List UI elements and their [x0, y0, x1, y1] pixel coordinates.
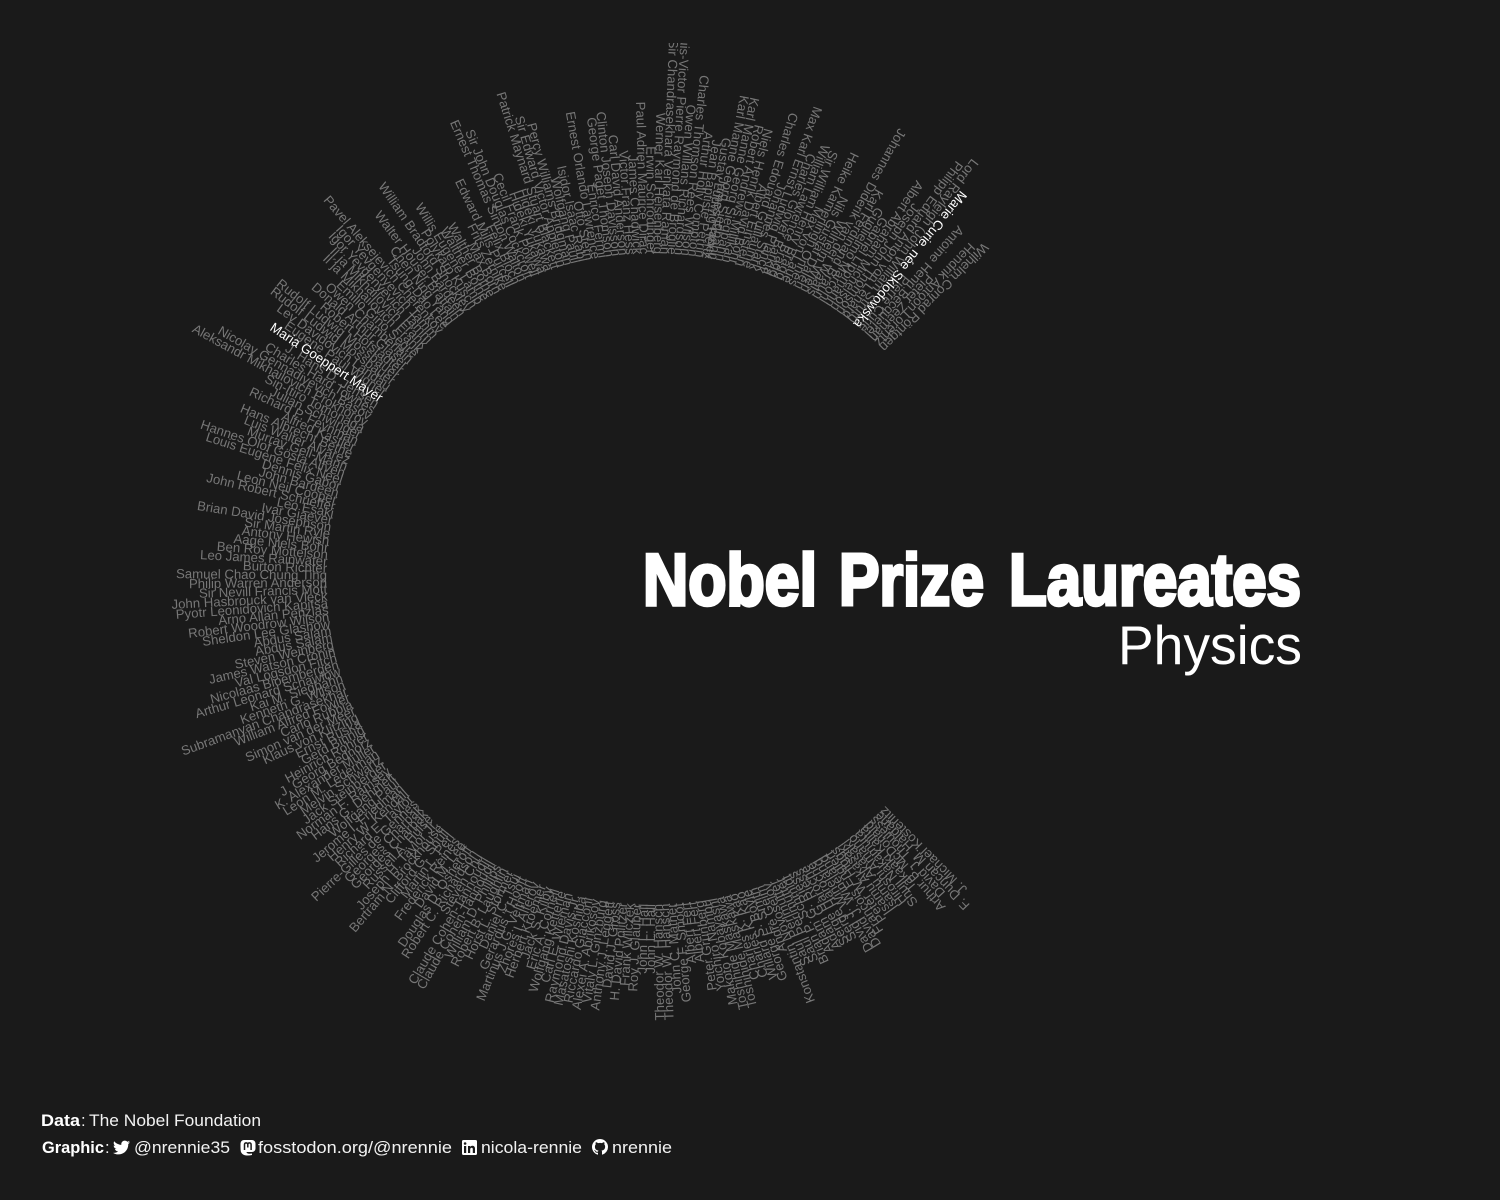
radial ring of laureate names: David J. Wineland	[810, 856, 876, 955]
radial ring of laureate names: Johannes Diderik van der Waals	[804, 126, 909, 299]
radial ring of laureate names: Victor Franz Hess	[616, 150, 638, 256]
radial ring of laureate names: Pyotr Leonidovich Kapitsa	[175, 595, 329, 622]
radial ring of laureate names: Adam G. Riess	[791, 866, 844, 952]
radial ring of laureate names: Robert B. Laughlin	[447, 865, 511, 969]
radial ring of laureate names: Albert Abraham Michelson	[828, 178, 926, 314]
radial ring of laureate names: Serge Haroche	[803, 859, 860, 944]
radial ring of laureate names: Albert Fert	[678, 901, 699, 964]
radial ring of laureate names: Jean Baptiste Perrin	[692, 139, 724, 259]
radial ring of laureate names: Charles Glover Barkla	[759, 151, 819, 278]
radial ring of laureate names: David J. Wineland	[816, 852, 884, 950]
radial ring of laureate names: James Chadwick	[625, 154, 645, 255]
radial ring of laureate names: Murray Gell-Mann	[245, 423, 350, 474]
radial ring of laureate names: Max von Laue	[779, 204, 827, 286]
title	[643, 540, 1301, 621]
radial ring of laureate names: Robert Hofstadter	[317, 299, 407, 377]
title: Prize	[839, 540, 984, 621]
radial ring of laureate names: William Lawrence Bragg	[766, 143, 833, 280]
radial ring of laureate names: Andre Geim	[752, 883, 790, 955]
radial ring of laureate names: Shuji Nakamura	[850, 827, 921, 910]
radial ring of laureate names: Antony Hewish	[241, 523, 330, 548]
radial ring of laureate names: William Bradford Shockley	[375, 179, 475, 315]
radial ring of laureate names: Konstantin Novoselov	[759, 880, 818, 1005]
radial ring of laureate names: Luis Walter Alvarez	[242, 412, 352, 467]
radial ring of laureate names: Felix Bloch	[483, 222, 524, 287]
radial ring of laureate names: Polykarp Kusch	[418, 226, 481, 311]
radial ring of laureate names: Norman F. Ramsey	[293, 764, 394, 843]
radial ring of laureate names: Ernest Thomas Sinton Walton	[447, 118, 530, 284]
radial ring of laureate names: Henry W. Kendall	[324, 786, 411, 864]
radial ring of laureate names: Il´ja Mikhailovich Frank	[320, 251, 426, 356]
radial ring of laureate names: Jack S. Kilby	[517, 884, 556, 961]
radial ring of laureate names: Owen Chamberlain	[323, 279, 416, 366]
radial ring of laureate names: Richard E. Taylor	[332, 791, 416, 870]
radial ring of laureate names: Wolfgang Paul	[326, 775, 402, 840]
radial ring of laureate names: J. Georg Bednorz	[277, 734, 374, 799]
radial ring of laureate names: Eric A. Cornell	[523, 887, 562, 971]
radial ring of laureate names: Werner Karl Heisenberg	[651, 113, 668, 254]
radial ring of laureate names: Hideki Yukawa	[506, 189, 550, 276]
radial ring of laureate names: Arthur B. McDonald	[861, 818, 948, 914]
radial ring of laureate names: Anthony J. Leggett	[587, 900, 617, 1011]
radial ring of laureate names: Frits Zernike	[464, 221, 511, 293]
radial ring of laureate names: Rudolf Ludwig Mössbauer	[268, 284, 399, 388]
radial ring of laureate names: Alexei A. Abrikosov	[569, 897, 603, 1011]
radial ring of laureate names: Isamu Akasaki	[833, 840, 895, 918]
radial ring of laureate names: Zhores I. Alferov	[494, 879, 543, 975]
radial ring of laureate names: James Franck	[702, 176, 731, 261]
footer: graphic credits: nrennie	[612, 1139, 672, 1157]
radial ring of laureate names: Heinrich Rohrer	[282, 728, 371, 786]
radial ring of laureate names: Georges Charpak	[347, 806, 431, 892]
radial ring of laureate names: Joseph H. Taylor Jr.	[353, 816, 441, 913]
radial ring of laureate names: Herbert Kroemer	[502, 882, 549, 980]
footer: graphic credits: :	[105, 1139, 110, 1157]
radial ring of laureate names: Robert Woodrow Wilson	[187, 609, 330, 641]
icon: linkedin	[462, 1140, 477, 1155]
radial ring of laureate names: Pierre Curie	[856, 272, 913, 336]
radial ring of laureate names: Sir Chandrasekhara Venkata Raman	[658, 39, 681, 255]
title: Laureates	[1009, 540, 1301, 621]
footer: data source: Data	[41, 1112, 81, 1130]
radial ring of laureate names: F. Duncan M. Haldane	[871, 809, 973, 913]
radial ring of laureate names: Sir Martin Ryle	[243, 514, 331, 541]
radial ring of laureate names: Theodor W. Hänsch	[650, 904, 667, 1021]
radial ring of laureate names: Sir William Henry Bragg	[773, 148, 841, 283]
radial ring of laureate names: Hannes Olof Gösta Alfvén	[199, 417, 347, 480]
radial ring of laureate names: John C. Mather	[664, 902, 684, 994]
radial ring of laureate names: Gerardus 't Hooft	[476, 874, 530, 972]
radial ring of laureate names: Chen Ning Yang	[387, 243, 458, 328]
radial ring of laureate names: Martin L. Perl	[397, 830, 457, 901]
radial ring of laureate names: Guglielmo Marconi	[816, 205, 886, 306]
highlighted name: Maria Goeppert Mayer: Maria Goeppert Mayer	[267, 320, 386, 405]
radial ring of laureate names: Toshihide Maskawa	[719, 893, 760, 1009]
radial ring of laureate names: William D. Phillips	[441, 861, 504, 961]
radial ring of laureate names: Bertram N. Brockhouse	[346, 821, 446, 935]
radial ring of laureate names: Hideki Yukawa	[515, 187, 556, 274]
radial ring of laureate names: Paul Adrien Maurice Dirac	[633, 101, 652, 255]
radial ring of laureate names: Igor Yevgenyevich Tamm	[333, 222, 442, 341]
radial ring of laureate names	[171, 0, 992, 1021]
radial ring of laureate names: Robert C. Richardson	[398, 847, 480, 961]
radial ring of laureate names: Sheldon Lee Glashow	[201, 616, 332, 649]
radial ring of laureate names: Serge Haroche	[797, 863, 852, 948]
footer: graphic credits: @nrennie35	[134, 1139, 230, 1157]
radial ring of laureate names: Eugene Paul Wigner	[282, 318, 390, 400]
footer: graphic credits: Graphic	[42, 1139, 104, 1157]
radial ring of laureate names: Arthur Leonard Schawlow	[193, 664, 343, 721]
radial ring of laureate names: Wilhelm Wien	[798, 217, 849, 295]
radial ring of laureate names: Pieter Zeeman	[867, 271, 936, 345]
radial ring of laureate names: George E. Smith	[746, 886, 790, 983]
radial ring of laureate names: Jack Steinberger	[300, 758, 390, 827]
radial ring of laureate names: James Watson Cronin	[207, 644, 337, 687]
radial ring of laureate names: Frank Wilczek	[617, 902, 637, 986]
radial ring of laureate names: John Bardeen	[409, 244, 469, 319]
radial ring of laureate names: Karl Manne Georg Siegbahn	[713, 96, 762, 263]
radial ring of laureate names: Erwin Schrödinger	[643, 146, 659, 255]
radial ring of laureate names: Sir John Douglas Cockcroft	[462, 127, 537, 281]
radial ring of laureate names: Lev Davidovich Landau	[274, 301, 394, 394]
radial ring of laureate names: Toshihide Maskawa	[712, 895, 751, 1011]
radial ring of laureate names: Samuel Chao Chung Ting	[176, 566, 327, 583]
radial ring of laureate names: Carl David Anderson	[605, 134, 631, 256]
radial ring of laureate names: Charles K. Kao	[726, 892, 762, 982]
radial ring of laureate names: Charles K. Kao	[732, 890, 771, 979]
radial ring of laureate names: Nicolay Gennadiyevich Basov	[216, 323, 375, 423]
radial ring of laureate names: Claude Cohen-Tannoudji	[414, 858, 498, 992]
radial ring of laureate names: Brian David Josephson	[196, 498, 332, 534]
radial ring of laureate names: Klaus von Klitzing	[260, 710, 361, 767]
radial ring of laureate names: Horst L. Störmer	[461, 868, 517, 962]
radial ring of laureate names: George Paget Thomson	[584, 116, 617, 258]
radial ring of laureate names: Sir Edward Victor Appleton	[512, 114, 570, 269]
radial ring of laureate names: Ernst Ruska	[293, 716, 364, 761]
radial ring of laureate names: Charles Thomson Rees Wilson	[678, 74, 712, 257]
radial ring of laureate names: Louis Eugène Félix Néel	[204, 429, 345, 487]
radial ring of laureate names: John L. Hall	[635, 904, 651, 974]
radial ring of laureate names: Otto Stern	[570, 200, 597, 262]
radial ring of laureate names: Philipp Eduard Anton von Lenard	[839, 158, 966, 322]
radial ring of laureate names: Gerd Binnig	[298, 722, 367, 768]
radial ring of laureate names: Pavel Aleksejevich Cherenkov	[321, 193, 447, 337]
radial ring of laureate names: Saul Perlmutter	[772, 875, 821, 965]
radial ring of laureate names: Steven Chu	[437, 851, 486, 917]
radial ring of laureate names: Ernest Orlando Lawrence	[563, 110, 603, 260]
radial ring of laureate names: Niels Henrik David Bohr	[726, 127, 776, 267]
radial ring of laureate names: Donald Arthur Glaser	[309, 279, 412, 372]
radial ring of laureate names: Edward Mills Purcell	[452, 176, 517, 290]
radial ring of laureate names: George F. Smoot	[671, 902, 694, 1003]
radial ring of laureate names: Brian P. Schmidt	[778, 872, 832, 966]
icon: github	[592, 1139, 608, 1155]
radial ring of laureate names: K. Alexander Müller	[272, 740, 378, 813]
radial ring of laureate names: Russell A. Hulse	[359, 812, 436, 892]
radial ring of laureate names: Enrico Fermi	[584, 183, 610, 259]
radial ring of laureate names: Antoine Henri Becquerel	[861, 223, 967, 340]
radial ring of laureate names: Peter W. Higgs	[827, 844, 889, 926]
radial ring of laureate names: Abdus Salam	[254, 630, 334, 659]
radial ring of laureate names: Willard S. Boyle	[739, 888, 781, 981]
radial ring of laureate names: Peter Grünberg	[692, 899, 720, 992]
radial ring of laureate names: Wolfgang Pauli	[548, 175, 583, 265]
radial ring of laureate names: Leo James Rainwater	[200, 547, 328, 569]
title: Nobel	[643, 540, 817, 621]
icon: twitter	[113, 1140, 130, 1154]
radial ring of laureate names: Hans G. Dehmelt	[308, 769, 398, 843]
radial ring of laureate names: Leon Neil Cooper	[235, 468, 339, 507]
radial ring of laureate names: H. David Politzer	[607, 901, 630, 1001]
radial ring of laureate names: William Alfred Fowler	[232, 690, 353, 749]
radial ring of laureate names: Owen Willans Richardson	[672, 104, 699, 256]
radial ring of laureate names: Martinus J.G. Veltman	[473, 877, 536, 1003]
radial ring of laureate names: Joseph John Thomson	[834, 201, 923, 318]
radial ring of laureate names: Max Born	[465, 239, 505, 296]
radial ring of laureate names: Daniel C. Tsui	[476, 871, 523, 951]
subtitle: Physics	[1118, 614, 1302, 676]
radial ring of laureate names: Pierre-Gilles de Gennes	[308, 796, 421, 904]
radial ring of laureate names: Makoto Kobayashi	[705, 897, 740, 1006]
radial ring of laureate names: Saul Perlmutter	[765, 878, 813, 968]
footer: data source: The Nobel Foundation	[89, 1112, 261, 1130]
radial ring of laureate names: Philip Warren Anderson	[189, 575, 327, 591]
radial ring of laureate names: Douglas D. Osheroff	[395, 842, 474, 950]
radial ring of laureate names: Jerome I. Friedman	[309, 781, 407, 865]
radial ring of laureate names: Carl E. Wieman	[538, 891, 576, 984]
radial ring of laureate names: Aleksandr Mikhailovich Prokhorov	[190, 321, 371, 429]
highlighted name: Marie Curie: Marie Curie, née Sklodowska	[850, 188, 970, 332]
radial ring of laureate names: Charles Hard Townes	[262, 339, 378, 417]
radial ring of laureate names: John Robert Schrieffer	[205, 470, 337, 514]
radial ring of laureate names: Il´ja Mikhailovich Frank	[327, 244, 431, 351]
radial ring of laureate names: Hiroshi Amano	[845, 832, 909, 909]
radial ring of laureate names: Adam G. Riess	[785, 869, 836, 956]
radial ring of laureate names: Willis Eugene Lamb	[412, 200, 487, 307]
footer: graphic credits	[42, 1139, 672, 1157]
radial ring of laureate names: J. Hans D. Jensen	[283, 341, 382, 411]
radial ring of laureate names: Subramanyan Chandrasekhar	[179, 683, 350, 758]
radial ring of laureate names: Steven Weinberg	[233, 637, 335, 672]
radial ring of laureate names: David J. Thouless	[866, 813, 948, 901]
radial ring of laureate names: François Englert	[821, 848, 886, 937]
radial ring of laureate names: Wolfgang Ketterle	[526, 889, 569, 994]
radial ring of laureate names: John Hasbrouck van Vleck	[171, 588, 328, 612]
footer: data source: :	[81, 1112, 86, 1130]
radial ring of laureate names: Rudolf Ludwig Mössbauer	[274, 276, 403, 383]
radial ring of laureate names: Vitaly L. Ginzburg	[579, 899, 610, 1004]
radial ring of laureate names: John Bardeen	[257, 464, 341, 500]
radial ring of laureate names: Nils Gustaf Dalén	[792, 194, 851, 292]
radial ring of laureate names: Karl Manne Georg Siegbahn	[706, 94, 752, 261]
radial ring of laureate names: Burton Richter	[243, 558, 328, 576]
radial ring of laureate names: Hendrik Antoon Lorentz	[872, 240, 978, 350]
radial ring of laureate names: Gustav Ludwig Hertz	[699, 137, 734, 260]
radial ring of laureate names: Aage Niels Bohr	[233, 531, 330, 555]
radial ring of laureate names: Val Logsdon Fitch	[233, 650, 338, 690]
radial ring of laureate names: Gabriel Lippmann	[822, 214, 891, 310]
radial ring of laureate names: Karl Ferdinand Braun	[810, 187, 886, 303]
radial ring of laureate names: Roy J. Glauber	[625, 903, 644, 992]
radial ring of laureate names: John L. Hall	[643, 904, 658, 974]
radial ring of laureate names: Emilio Gino Segrè	[334, 277, 421, 361]
radial ring of laureate names: Kai M. Siegbahn	[248, 670, 345, 714]
radial ring of laureate names: Takaaki Kajita	[855, 822, 920, 895]
icon: mastodon	[240, 1140, 256, 1156]
radial ring of laureate names: Percy Williams Bridgman	[524, 121, 576, 267]
radial ring of laureate names: Alfred Kastler	[279, 409, 358, 455]
radial ring of laureate names: Isamu Akasaki	[839, 836, 902, 913]
radial ring of laureate names: Sin-Itiro Tomonaga	[262, 371, 368, 436]
radial ring of laureate names: Albert Fert	[685, 900, 707, 964]
radial ring of laureate names: Sir Nevill Francis Mott	[199, 582, 328, 601]
radial ring of laureate names: Lord Rayleigh (John William Strutt)	[845, 156, 981, 327]
radial ring of laureate names: Charles Edouard Guillaume	[740, 111, 801, 270]
radial ring of laureate names: Georges Charpak	[341, 801, 426, 885]
radial ring of laureate names: Leo Esaki	[275, 494, 335, 521]
radial ring of laureate names: Abdus Salam	[252, 623, 332, 650]
radial ring of laureate names: J. Michael Kosterlitz	[876, 804, 970, 897]
radial ring of laureate names: Ivar Giaever	[260, 500, 334, 528]
radial ring of laureate names: Walter Houser Brattain	[372, 208, 463, 323]
radial ring of laureate names: Dennis Gabor	[260, 456, 343, 494]
radial ring of laureate names: Clifford G. Shull	[382, 826, 452, 906]
radial ring of laureate names: Arthur Holly Compton	[685, 131, 716, 257]
radial ring of laureate names: Isidor Isaac Rabi	[554, 164, 590, 263]
radial ring of laureate names: David M. Lee	[411, 839, 469, 911]
radial ring of laureate names: Simon van der Meer	[243, 703, 358, 765]
radial ring of laureate names: Richard P. Feynman	[247, 384, 361, 448]
radial ring of laureate names: Walther Bothe	[437, 224, 493, 303]
radial ring of laureate names: Wilhelm Conrad Röntgen	[877, 240, 992, 355]
radial ring of laureate names: Kenneth G. Wilson	[238, 677, 347, 727]
radial ring of laureate names: Albert Einstein	[733, 182, 770, 268]
radial ring of laureate names: Julian Schwinger	[268, 384, 365, 442]
radial ring of laureate names: Masatoshi Koshiba	[551, 894, 589, 1007]
radial ring of laureate names: Johannes Stark	[746, 181, 789, 273]
radial ring of laureate names: Nicolaas Bloembergen	[208, 657, 340, 707]
radial ring of laureate names: Tsung-Dao Lee	[384, 253, 452, 332]
radial ring of laureate names: Theodor W. Hänsch	[657, 903, 677, 1021]
radial ring of laureate names: Claude Cohen-Tannoudji	[405, 854, 492, 987]
radial ring of laureate names: Hans Albrecht Bethe	[238, 401, 355, 461]
radial ring of laureate names: David J. Gross	[599, 901, 624, 989]
footer: graphic credits: fosstodon.org/@nrennie	[258, 1139, 452, 1157]
radial ring of laureate names: Frederick Reines	[391, 834, 463, 923]
radial ring of laureate names: Heike Kamerlingh Onnes	[785, 150, 862, 289]
radial ring of laureate names: Clinton Joseph Davisson	[593, 111, 624, 257]
radial ring of laureate names: Riccardo Giacconi	[561, 896, 596, 1004]
radial ring of laureate names: Igor Yevgenyevich Tamm	[325, 229, 436, 346]
radial ring of laureate names: Cecil Frank Powell	[490, 171, 543, 278]
radial ring of laureate names: Max Karl Ernst Ludwig Planck	[753, 105, 825, 275]
radial ring of laureate names: Patrick Maynard Stuart Blackett	[494, 90, 563, 271]
radial ring of laureate names: Ben Roy Mottelson	[216, 539, 328, 562]
radial ring of laureate names: Melvin Schwartz	[297, 752, 385, 818]
radial ring of laureate names: Robert Andrews Millikan	[720, 123, 767, 264]
radial ring of laureate names: Walther Bothe	[445, 220, 499, 300]
radial ring of laureate names: Arno Allan Penzias	[218, 602, 330, 628]
footer: graphic credits: nicola-rennie	[481, 1139, 582, 1157]
radial ring of laureate names: Leon M. Lederman	[280, 746, 381, 818]
radial ring of laureate names: Carlo Rubbia	[278, 696, 355, 740]
radial ring of laureate names: Raymond Davis Jr.	[542, 893, 582, 1004]
radial ring of laureate names: Yoichiro Nambu	[698, 898, 729, 992]
